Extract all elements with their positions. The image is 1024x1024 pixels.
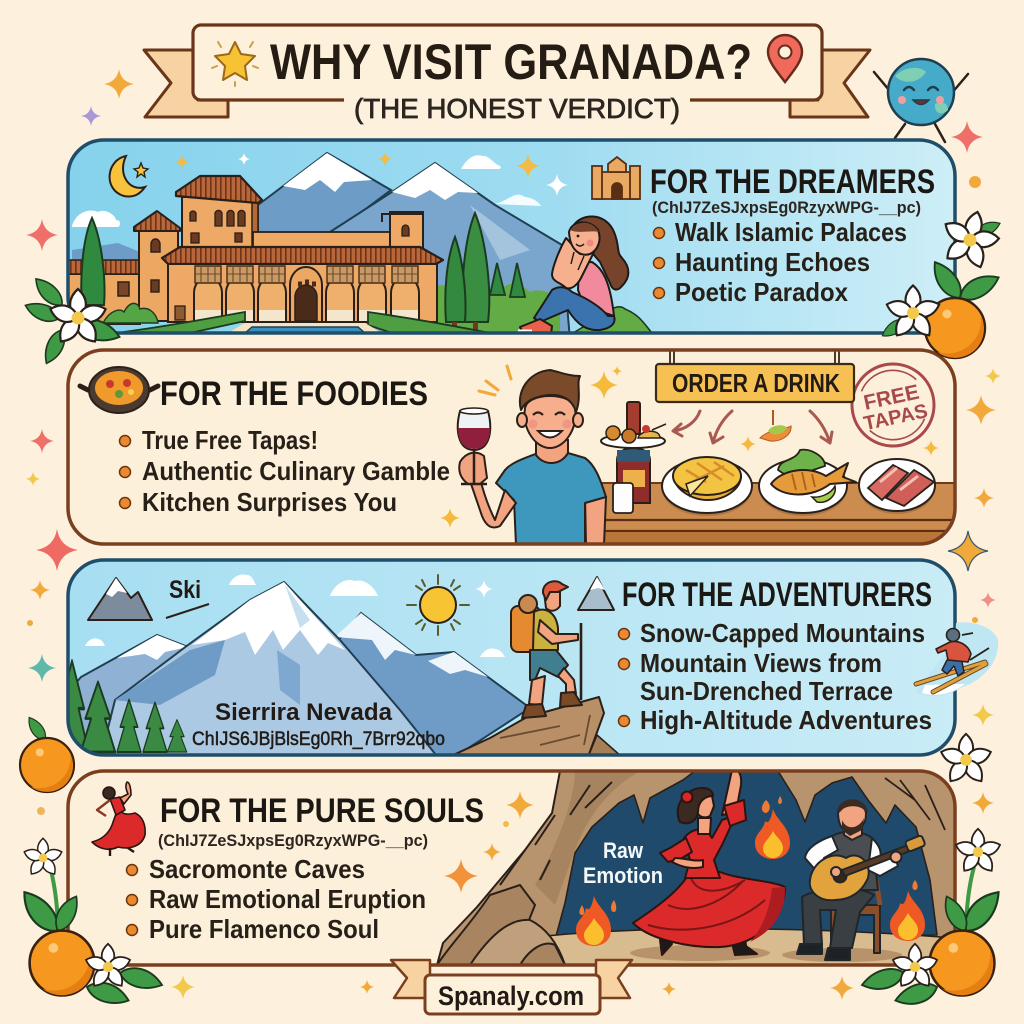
bullet list (120, 425, 450, 517)
illustration: flamenco in cave (437, 770, 955, 965)
plate: jamon (859, 459, 935, 514)
garden hedges (123, 312, 245, 333)
upper gallery (253, 232, 393, 248)
footer badge (391, 960, 632, 1014)
icon: paella pan (80, 367, 158, 413)
bullet list: Haunting Echoes (675, 247, 870, 277)
sierra label: Sierrira Nevada (215, 699, 393, 726)
panel: for the adventurers (56, 560, 998, 760)
ski label: Ski (169, 576, 201, 604)
bullet list: Sun-Drenched Terrace (640, 676, 893, 706)
bullet list: Walk Islamic Palaces (675, 217, 907, 247)
site name: Spanaly.com (438, 981, 584, 1011)
plate: fish (759, 450, 856, 516)
left wing (68, 274, 140, 324)
wooden table (602, 484, 954, 530)
cave floor (545, 929, 955, 965)
panel: for the dreamers (68, 140, 955, 340)
bullet list: Mountain Views from (640, 648, 882, 678)
decoration: orange cluster bottom right (860, 829, 1006, 1010)
panel: for the foodies (68, 350, 960, 546)
bullet list: Sacromonte Caves (149, 854, 365, 884)
sun (407, 575, 469, 635)
bullet list: Snow-Capped Mountains (640, 618, 925, 648)
left tower (139, 229, 178, 321)
pine trees (56, 661, 187, 752)
order sign (656, 364, 854, 402)
main building (168, 264, 437, 322)
icon: crescent moon (110, 156, 145, 197)
free tapas stamp: TAPAS (862, 400, 930, 435)
decoration: orange blossom right of panel one (879, 204, 1006, 358)
panel border (68, 350, 955, 544)
footer box (425, 975, 600, 1014)
heading: FOR THE DREAMERS (650, 163, 935, 201)
clouds (330, 580, 378, 596)
decoration: flower right of panel three (939, 734, 993, 785)
reflecting pool (230, 323, 380, 332)
panel border (68, 560, 955, 755)
left cypress (81, 218, 104, 305)
raw emotion label: Raw (603, 838, 644, 863)
foreground rocks (437, 885, 555, 965)
left ribbon (144, 50, 228, 117)
sauce bottle (617, 402, 650, 503)
bullet list (618, 618, 932, 735)
bullet list (654, 217, 907, 307)
bullet list: High-Altitude Adventures (640, 705, 932, 735)
main tower (181, 198, 252, 246)
girl sitting (518, 216, 628, 335)
icon: mountain (88, 578, 152, 620)
dancer (633, 770, 785, 955)
cave rock (437, 771, 955, 965)
title box (193, 25, 822, 100)
tapas tray (601, 424, 666, 448)
arrows (673, 411, 832, 443)
icon: skier (915, 622, 998, 696)
wine glass (458, 408, 490, 484)
hiker (511, 581, 582, 718)
plate: tortilla (662, 457, 752, 516)
place id: (ChIJ7ZeSJxpsEg0RzyxWPG-__pc) (652, 198, 921, 217)
man with wine glass (459, 366, 606, 545)
free tapas stamp: FREE (862, 381, 921, 415)
panel border (68, 771, 955, 965)
decoration: orange left of panel three (20, 714, 74, 792)
free tapas stamp (850, 362, 936, 448)
illustration: tapas table (440, 350, 960, 546)
green ground (438, 284, 560, 332)
icon: star (212, 42, 258, 86)
bush (103, 303, 158, 323)
subtitle plate (344, 96, 690, 104)
mountains (258, 153, 391, 240)
place id: (ChIJ7ZeSJxpsEg0RzyxWPG-__pc) (158, 831, 428, 850)
raw emotion label (583, 838, 663, 888)
subtitle: (THE HONEST VERDICT) (354, 93, 680, 124)
title banner (144, 25, 870, 124)
decoration: orange cluster bottom left (16, 838, 165, 1009)
arcade (194, 266, 419, 322)
footer ribbons (391, 960, 430, 998)
order sign: ORDER A DRINK (672, 368, 840, 398)
raw emotion label: Emotion (583, 863, 663, 888)
heading: FOR THE FOODIES (160, 375, 428, 413)
flames (576, 896, 611, 946)
heading: FOR THE PURE SOULS (160, 792, 484, 830)
icon: mountain small (578, 577, 614, 610)
place id: ChIJS6JBjBlsEg0Rh_7Brr92qbo (192, 729, 445, 750)
illustration: Alhambra palace scene (68, 152, 652, 340)
guitarist (797, 799, 926, 960)
bullet list: Raw Emotional Eruption (149, 884, 426, 914)
illustration: Sierra Nevada (56, 574, 622, 760)
decoration: blossom cluster top left (23, 274, 122, 367)
main roof (162, 247, 443, 264)
cave interior (555, 771, 937, 940)
panel: for the pure souls (68, 770, 955, 965)
bullet list: Poetic Paradox (675, 277, 848, 307)
bullet list: Pure Flamenco Soul (149, 914, 379, 944)
mountains (70, 635, 240, 760)
icon: map pin (768, 35, 802, 82)
panel border (68, 140, 955, 333)
icon: smiling globe mascot (874, 59, 968, 142)
small tapa (760, 410, 791, 441)
title text: WHY VISIT GRANADA? (270, 34, 752, 90)
icon: flamenco dancer (92, 782, 145, 856)
bullet list: Kitchen Surprises You (142, 487, 397, 517)
sign posts (669, 352, 840, 363)
bullet list (126, 854, 426, 944)
rock cliff (449, 697, 604, 757)
icon: castle (592, 157, 640, 199)
right ribbon (790, 50, 870, 117)
salt shaker (613, 483, 633, 513)
bullet list: True Free Tapas! (142, 425, 318, 455)
bullet list: Authentic Culinary Gamble (142, 456, 450, 486)
right cypresses (462, 213, 489, 322)
